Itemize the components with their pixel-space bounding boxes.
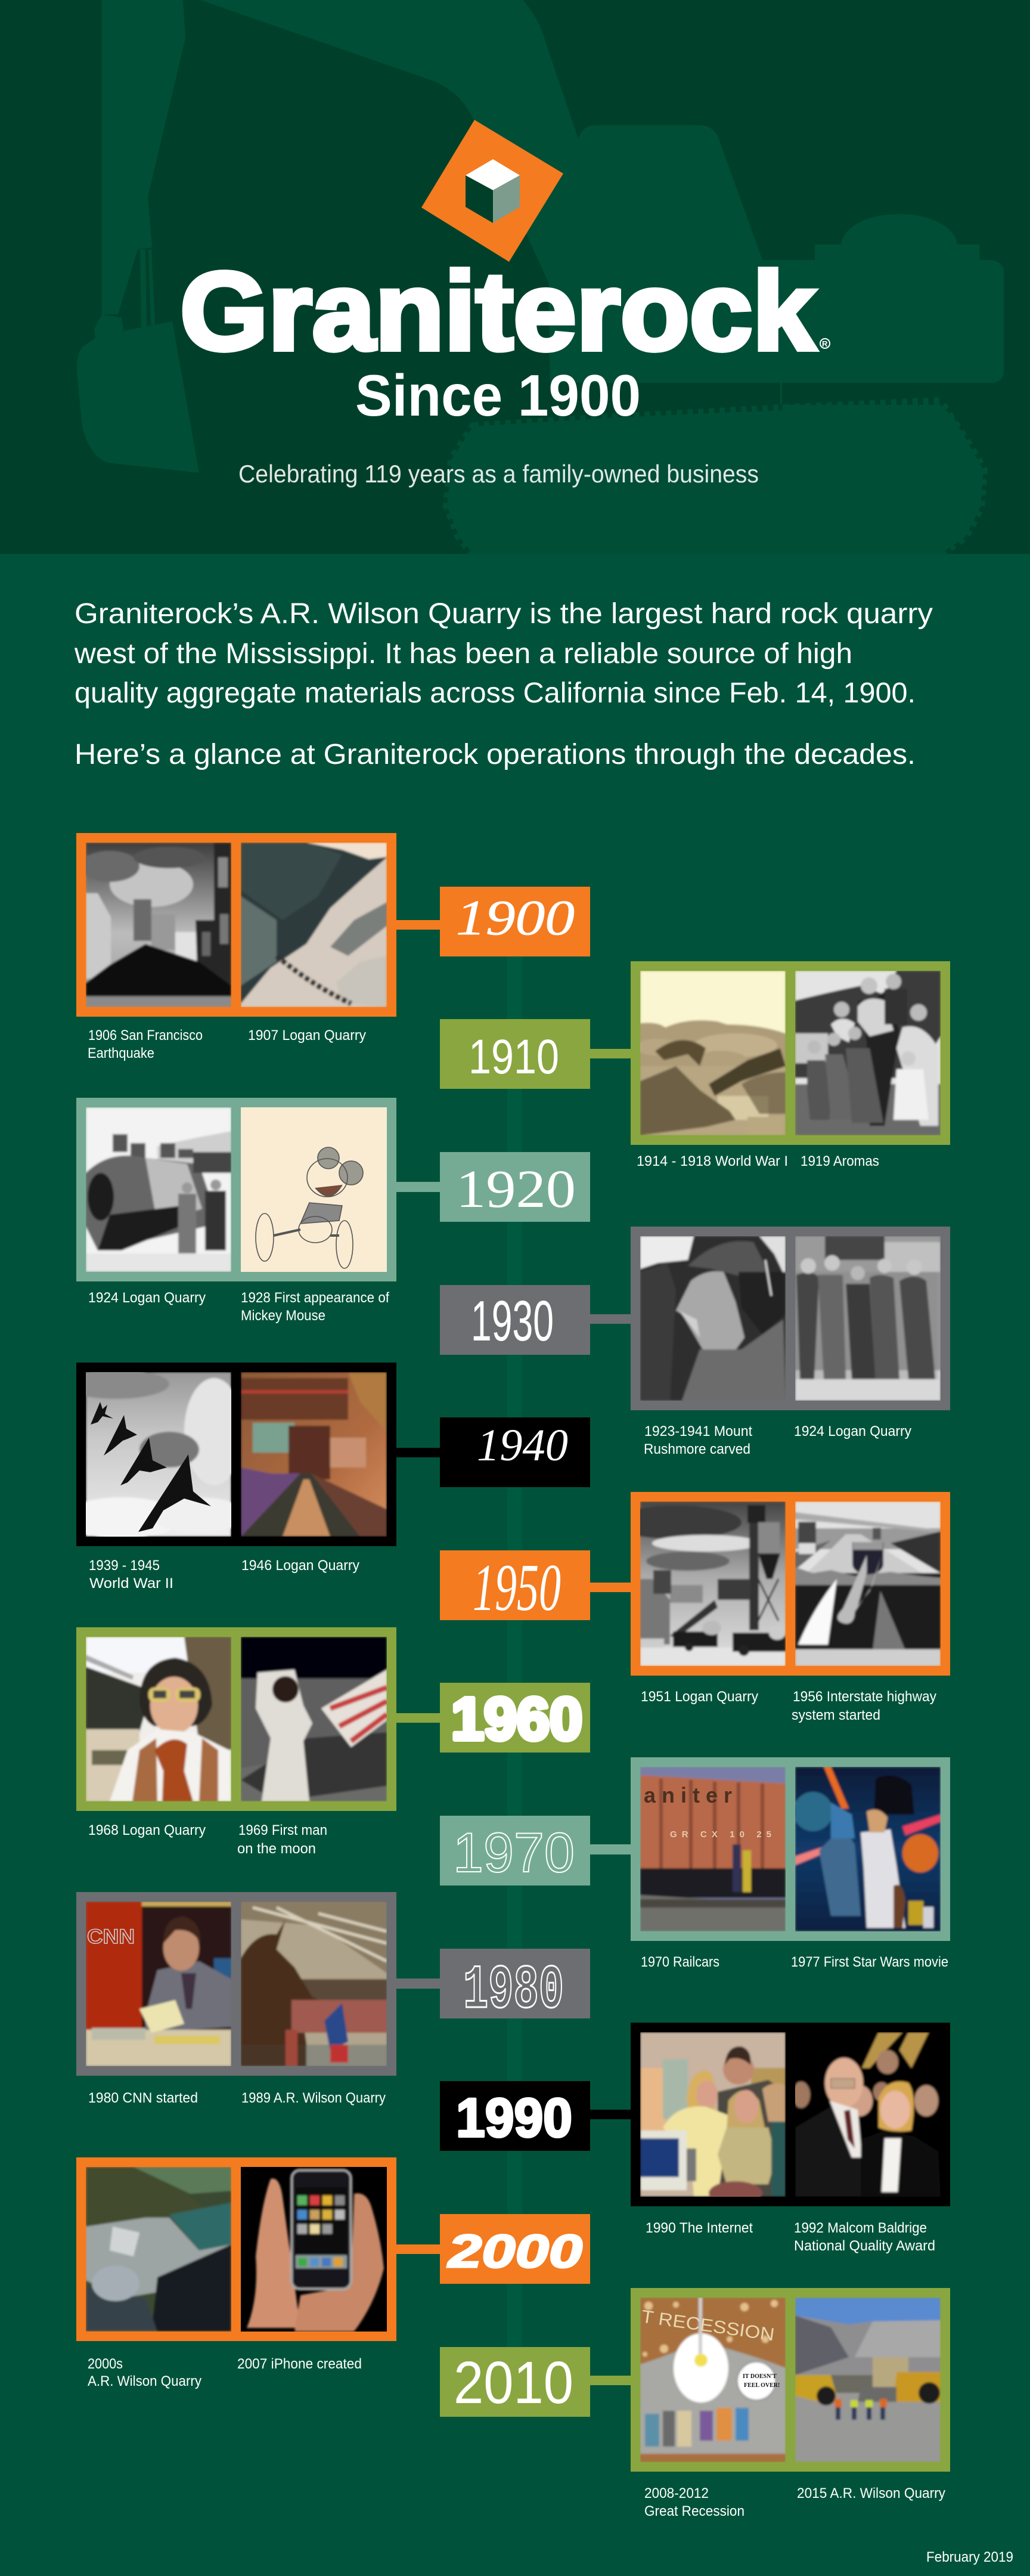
caption 1919: 1919 Aromas bbox=[801, 1153, 879, 1169]
registered mark: R bbox=[822, 339, 828, 348]
photo: 1951 Logan Quarry plant bbox=[640, 1501, 786, 1666]
year badge 1910 bbox=[440, 1019, 590, 1089]
caption 1939: 1939 - 1945 bbox=[89, 1558, 160, 1574]
caption 1924: 1924 Logan Quarry bbox=[88, 1290, 206, 1306]
year badge 1940: 1940 bbox=[477, 1420, 568, 1470]
year badge 1930: 1930 bbox=[471, 1289, 554, 1353]
photo: 2015 A.R. Wilson Quarry bbox=[795, 2298, 941, 2462]
caption 1939: World War II bbox=[89, 1575, 173, 1592]
caption 1923-1941: 1923-1941 Mount bbox=[644, 1423, 752, 1439]
caption 1969 bbox=[237, 1822, 327, 1857]
caption 1906: 1906 San Francisco bbox=[88, 1027, 203, 1044]
intro text: quality aggregate materials across California since Feb. 14, 1900. bbox=[75, 677, 916, 709]
intro text: Here’s a glance at Graniterock operations through the decades. bbox=[75, 739, 916, 770]
caption 1906: Earthquake bbox=[88, 1045, 154, 1061]
panel: 1970 bbox=[440, 1757, 950, 1970]
year badge 1940 bbox=[440, 1417, 590, 1487]
year badge 1970: 1970 bbox=[453, 1821, 575, 1884]
year badge 1990: 1990 bbox=[456, 2088, 572, 2148]
photo: 1907 Logan Quarry bbox=[241, 843, 387, 1007]
photo: 1928 Mickey Mouse sketch bbox=[241, 1107, 387, 1272]
photo: 2000s A.R. Wilson Quarry aerial bbox=[86, 2167, 231, 2332]
caption 1906 bbox=[88, 1027, 203, 1061]
panel: 1940 bbox=[62, 1363, 590, 1592]
caption 1992 bbox=[794, 2220, 935, 2254]
logo bbox=[180, 120, 830, 373]
caption 1907: 1907 Logan Quarry bbox=[248, 1027, 366, 1044]
caption 1977: 1977 First Star Wars movie bbox=[791, 1954, 948, 1970]
caption 2007: 2007 iPhone created bbox=[237, 2356, 362, 2372]
caption 1990: 1990 The Internet bbox=[646, 2220, 753, 2236]
year badge 1900 bbox=[440, 887, 590, 956]
panel: 2000 bbox=[76, 2157, 590, 2389]
header band bbox=[0, 0, 1030, 554]
date footnote: February 2019 bbox=[926, 2549, 1013, 2565]
year badge 2000 bbox=[440, 2214, 590, 2284]
caption 1923-1941: Rushmore carved bbox=[644, 1441, 750, 1457]
wordmark: Graniterock bbox=[180, 250, 816, 373]
photo: 1970 railcars: GR CX 10 25 bbox=[670, 1829, 771, 1840]
caption 1969: on the moon bbox=[237, 1841, 316, 1857]
year badge 1910: 1910 bbox=[469, 1030, 559, 1084]
caption 1970: 1970 Railcars bbox=[641, 1954, 719, 1970]
photo: 1924 locomotive bbox=[86, 1107, 231, 1272]
caption 1956 bbox=[792, 1689, 936, 1723]
caption 1956: 1956 Interstate highway bbox=[793, 1689, 936, 1705]
icon: orange diamond with cube bbox=[421, 120, 563, 262]
caption 1914: 1914 - 1918 World War I bbox=[637, 1153, 788, 1169]
photo: 2008-2012 recession cartoon bbox=[640, 2298, 786, 2462]
photo: 1970 railcars: a n i t e r bbox=[644, 1783, 732, 1807]
caption 1928: Mickey Mouse bbox=[241, 1308, 325, 1324]
caption 1946: 1946 Logan Quarry bbox=[241, 1558, 359, 1574]
photo: 1956 Interstate highway bbox=[795, 1501, 941, 1666]
panel: 1950 bbox=[440, 1492, 950, 1723]
caption 1928: 1928 First appearance of bbox=[241, 1290, 389, 1306]
year badge 1900: 1900 bbox=[456, 890, 575, 946]
caption 2000s bbox=[88, 2356, 201, 2389]
year badge 1920: 1920 bbox=[456, 1160, 576, 1219]
caption 1968: 1968 Logan Quarry bbox=[88, 1822, 206, 1838]
caption 1924: 1924 Logan Quarry bbox=[794, 1423, 911, 1439]
photo: 1992 Malcolm Baldrige award bbox=[795, 2032, 941, 2197]
caption 1969: 1969 First man bbox=[238, 1822, 327, 1838]
photo: 1968 Logan Quarry woman bbox=[86, 1637, 231, 1801]
year badge 1960: 1960 bbox=[451, 1686, 582, 1753]
photo: 1969 first man on the moon bbox=[241, 1637, 387, 1801]
year badge 1980: 1980 bbox=[463, 1956, 564, 2026]
panel: 1900 bbox=[76, 833, 590, 1061]
caption 1992: 1992 Malcom Baldrige bbox=[794, 2220, 927, 2236]
caption 1989: 1989 A.R. Wilson Quarry bbox=[241, 2090, 386, 2106]
caption 1923-1941 bbox=[644, 1423, 752, 1457]
caption 1980: 1980 CNN started bbox=[88, 2090, 198, 2106]
panel: 1920 bbox=[76, 1098, 590, 1324]
photo: 1970 railcars bbox=[640, 1767, 786, 1931]
caption 1956: system started bbox=[792, 1707, 880, 1723]
panel: 1930 bbox=[440, 1227, 950, 1457]
subtitle: Celebrating 119 years as a family-owned business bbox=[238, 460, 759, 488]
year badge 2010: 2010 bbox=[454, 2349, 573, 2416]
photo: 2008-2012 recession cartoon: FEEL OVER! bbox=[744, 2382, 780, 2389]
panel: 1960 bbox=[76, 1627, 590, 1857]
timeline spine bbox=[507, 887, 522, 2389]
photo: 2007 iPhone created bbox=[241, 2167, 387, 2332]
excavator silhouette bbox=[77, 0, 1004, 554]
photo: San Francisco earthquake bbox=[86, 843, 231, 1007]
photo: 1980 CNN started bbox=[86, 1902, 231, 2066]
photo: 1919 Aromas family bbox=[795, 971, 941, 1135]
photo: 1980 CNN started: CNN bbox=[87, 1925, 135, 1948]
caption 1928 bbox=[241, 1290, 389, 1324]
intro text: Graniterock’s A.R. Wilson Quarry is the largest hard rock quarry bbox=[75, 598, 933, 630]
photo: 1989 A.R. Wilson Quarry elephant bbox=[241, 1902, 387, 2066]
photo: 1990 the Internet bbox=[640, 2032, 786, 2197]
panel: 1910 bbox=[440, 961, 950, 1169]
tagline: since 1900: Since 1900 bbox=[355, 363, 641, 428]
panel: 2010 bbox=[440, 2288, 950, 2519]
photo: 1946 Logan Quarry bbox=[241, 1372, 387, 1537]
panel: 1990 bbox=[440, 2023, 950, 2254]
photo: 2008-2012 recession cartoon: IT DOESN'T bbox=[743, 2373, 777, 2380]
year badge 1920 bbox=[440, 1152, 590, 1222]
photo: Mount Rushmore carved bbox=[640, 1236, 786, 1401]
photo: 1924 Logan Quarry crew bbox=[795, 1236, 941, 1401]
year badge 1950: 1950 bbox=[473, 1551, 561, 1625]
caption 2008-2012: 2008-2012 bbox=[644, 2485, 709, 2501]
photo: 1977 Star Wars poster bbox=[795, 1767, 941, 1931]
caption 1992: National Quality Award bbox=[794, 2238, 935, 2254]
intro text bbox=[74, 598, 933, 770]
caption 1939 bbox=[89, 1558, 173, 1592]
caption 2000s: A.R. Wilson Quarry bbox=[88, 2373, 201, 2389]
year badge 1980 bbox=[440, 1949, 590, 2026]
year badge 2000: 2000 bbox=[446, 2225, 582, 2277]
caption 2008-2012 bbox=[644, 2485, 744, 2519]
photo: World War I soldier bbox=[640, 971, 786, 1135]
caption 1951: 1951 Logan Quarry bbox=[641, 1689, 758, 1705]
caption 2008-2012: Great Recession bbox=[644, 2503, 744, 2519]
caption 2000s: 2000s bbox=[88, 2356, 123, 2372]
photo: World War II bombers bbox=[86, 1372, 231, 1537]
photo: 2008-2012 recession cartoon: T RECESSION bbox=[640, 2306, 775, 2345]
panel: 1980 bbox=[76, 1892, 590, 2106]
caption 2015: 2015 A.R. Wilson Quarry bbox=[797, 2485, 945, 2501]
intro text: west of the Mississippi. It has been a reliable source of high bbox=[74, 638, 852, 670]
year badge 1930 bbox=[440, 1285, 590, 1355]
registered mark bbox=[820, 339, 830, 348]
